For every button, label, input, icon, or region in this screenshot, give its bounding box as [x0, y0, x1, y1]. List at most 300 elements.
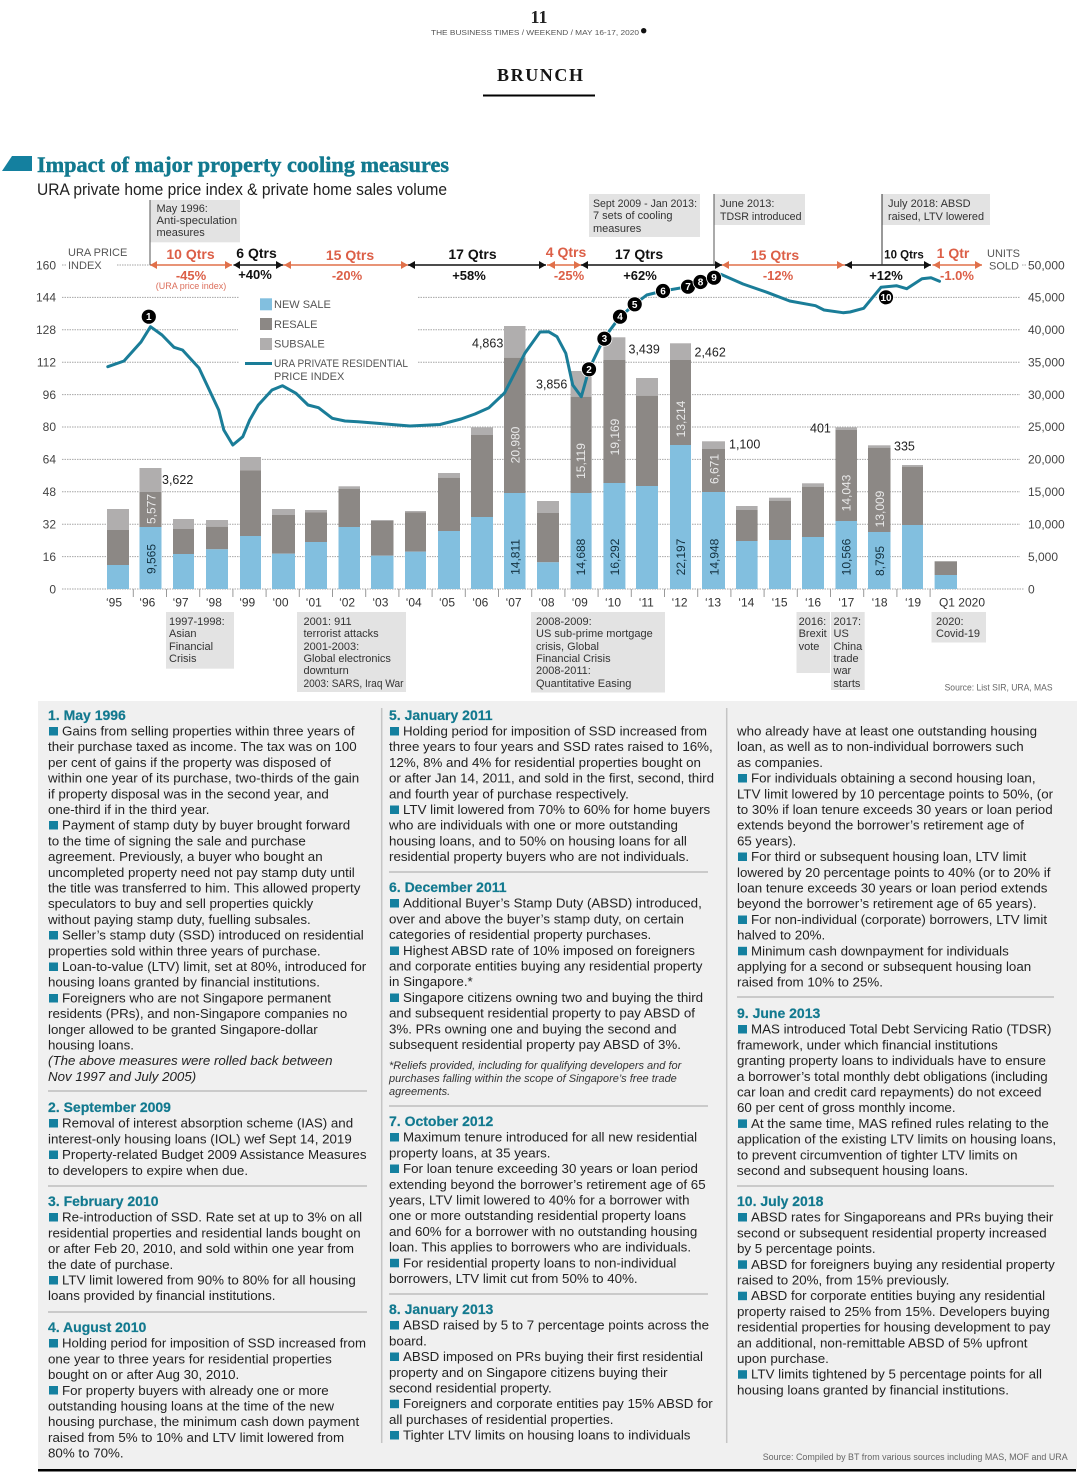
section: 5. January 2011: three years to four years and SSD rates raised to 16%, — [389, 739, 713, 754]
numbered markers — [141, 270, 894, 377]
callout: 2001-2003 events: 2003: SARS, Iraq War — [304, 678, 404, 690]
section: 8. January 2013 continued: raised from 10% to 25%. — [737, 975, 883, 990]
right axis labels: 50,000 — [1028, 258, 1065, 272]
section: 10. July 2018: ABSD for corporate entities buying any residential — [751, 1288, 1045, 1303]
subsale value labels: 4,863 — [472, 336, 503, 350]
callout: 2001-2003 events — [297, 612, 406, 692]
right axis labels: 30,000 — [1028, 388, 1065, 402]
x axis year labels: ‘10 — [605, 596, 621, 610]
section: 1. May 1996: housing loans. — [48, 1038, 134, 1052]
column 1 — [47, 707, 367, 1461]
section: 10. July 2018: by 5 percentage points. — [737, 1241, 876, 1256]
right axis labels: 35,000 — [1028, 356, 1065, 370]
section: 7. October 2012: extending beyond the borrower’s retirement age of 65 — [389, 1177, 706, 1192]
numbered markers: 10 — [880, 293, 892, 304]
period labels: percentage change: (URA price index) — [156, 281, 226, 291]
column 3 — [736, 724, 1056, 1397]
legend: URA PRIVATE RESIDENTIAL — [274, 358, 408, 370]
axis titles: INDEX — [68, 260, 102, 272]
left axis labels: 128 — [36, 323, 56, 337]
x axis year labels: ‘05 — [439, 596, 455, 610]
grid lines — [62, 265, 1027, 589]
callout: Sept 2009 - Jan 2013: Sept 2009 - Jan 2013: — [593, 198, 697, 210]
section: 3. February 2010: or after Feb 20, 2010, and sold within one year from — [48, 1241, 354, 1256]
axis titles: SOLD — [989, 260, 1019, 272]
right axis labels: 0 — [1028, 582, 1035, 596]
callout: 2008-2011 events: 2008-2011: — [536, 665, 591, 677]
callout: 2001-2003 events: downturn — [304, 665, 349, 677]
x axis year labels: ‘04 — [406, 596, 422, 610]
section: 7. October 2012: 7. October 2012 — [389, 1113, 493, 1129]
section: 9. June 2013: 60 per cent of gross monthly income. — [737, 1100, 956, 1115]
period labels: percentage change: +58% — [452, 268, 486, 283]
section: 8. January 2013 continued: halved to 20%. — [737, 928, 825, 943]
section: 6. December 2011: Singapore citizens owning two and buying the third — [403, 990, 703, 1005]
right axis labels: 45,000 — [1028, 290, 1065, 304]
callout: 2001-2003 events: Global electronics — [304, 653, 391, 665]
callout: US China trade war: 2017: — [834, 616, 861, 628]
section: 9. June 2013: a borrower’s total monthly debt obligations (including — [737, 1069, 1048, 1084]
section: 1. May 1996: properties sold within three years of purchase. — [48, 943, 321, 958]
section: 1. May 1996: without paying stamp duty, fuelling subsales. — [47, 912, 311, 927]
section: 8. January 2013: ABSD raised by 5 to 7 percentage points across the — [403, 1318, 709, 1333]
x axis year labels: ‘13 — [705, 596, 721, 610]
x axis year labels: ‘16 — [805, 596, 821, 610]
section: 4. August 2010: outstanding housing loans at the time of the new — [48, 1398, 334, 1414]
panel: measures background — [38, 701, 1077, 1469]
section: 1. May 1996: per cent of gains if the property was disposed of — [48, 755, 331, 770]
page number: 11 — [530, 7, 548, 27]
rotated values inside bars: 8,795 — [873, 546, 887, 576]
column separators — [382, 708, 727, 1443]
legend — [245, 298, 408, 383]
section: 2. September 2009: Removal of interest absorption scheme (IAS) and — [62, 1116, 353, 1131]
period labels: percentage change: +62% — [623, 268, 657, 283]
rotated values inside bars: 13,214 — [674, 400, 688, 437]
subsale value labels: 3,856 — [536, 378, 567, 392]
section: 10. July 2018: ABSD for foreigners buying any residential property — [751, 1257, 1055, 1272]
section: 6. December 2011 — [388, 879, 703, 1098]
legend: SUBSALE — [274, 338, 325, 350]
x axis year labels: ‘95 — [106, 596, 122, 610]
numbered markers: 6 — [660, 286, 666, 298]
period labels: quarters: 1 Qtr — [937, 245, 970, 261]
section: 5. January 2011 — [388, 707, 714, 864]
callout: Asian Financial Crisis: Asian — [169, 628, 197, 640]
period labels: percentage change: -25% — [554, 268, 585, 283]
callout: US China trade war: trade — [834, 653, 859, 665]
section: 7. October 2012: property loans, at 35 years. — [389, 1145, 551, 1160]
section: 8. January 2013 continued: loan tenure exceeds 30 years or loan period extends — [737, 880, 1048, 896]
callout: 2008-2011 events: crisis, Global — [536, 641, 599, 653]
x axis year labels: ‘96 — [139, 596, 156, 610]
axis titles: URA PRICE — [68, 247, 127, 259]
section: 1. May 1996: Payment of stamp duty by buyer brought forward — [62, 818, 350, 833]
left axis labels: 32 — [43, 518, 56, 532]
rotated values inside bars: 19,169 — [608, 418, 622, 455]
section: 1. May 1996: 1. May 1996 — [48, 707, 126, 723]
callout: Asian Financial Crisis — [166, 612, 234, 669]
icon: teal trapezoid — [2, 156, 32, 171]
numbered markers: 5 — [632, 300, 638, 311]
x axis year labels: ‘06 — [472, 596, 489, 610]
section: 6. December 2011: *Reliefs provided, including for qualifying developers and for — [389, 1060, 683, 1072]
legend: NEW SALE — [274, 299, 331, 311]
period labels: percentage change: -45% — [176, 268, 207, 283]
section: 10. July 2018: raised to 20%, from 15% previously. — [737, 1272, 949, 1288]
section: 4. August 2010: For property buyers with already one or more — [62, 1383, 329, 1398]
x axis year labels: ‘07 — [506, 596, 522, 610]
x axis year labels: ‘99 — [239, 596, 256, 610]
callout: May 1996: May 1996: — [156, 203, 208, 215]
section: 7. October 2012: For loan tenure exceeding 30 years or loan period — [403, 1161, 698, 1176]
left axis labels: 112 — [37, 356, 56, 370]
right axis labels: 5,000 — [1028, 550, 1058, 564]
section: 8. January 2013: 8. January 2013 — [389, 1301, 494, 1317]
subsale value labels: 2,462 — [694, 346, 726, 360]
section: 8. January 2013 continued: For individuals obtaining a second housing loan, — [751, 771, 1036, 786]
subsale value labels: 3,439 — [628, 342, 660, 356]
x axis year labels: ‘09 — [572, 596, 588, 610]
section: 10. July 2018: housing loans granted by financial institutions. — [737, 1382, 1009, 1397]
section: 7. October 2012: For residential property loans to non-individual — [403, 1255, 676, 1270]
x axis year labels: ‘08 — [538, 596, 555, 610]
section: 9. June 2013: to prevent circumvention of tighter LTV limits on — [737, 1147, 1018, 1162]
callout: Brexit: vote — [799, 641, 819, 653]
section: 8. January 2013 continued: For third or subsequent housing loan, LTV limit — [751, 849, 1027, 864]
section: 8. January 2013 continued: 65 years). — [737, 833, 796, 848]
section: 5. January 2011: or after Jan 14, 2011, and sold in the first, second, third — [389, 771, 714, 786]
left axis labels: 160 — [36, 258, 56, 272]
callout: Covid-19: 2020: — [936, 616, 964, 628]
section: 4. August 2010: bought on or after Aug 30, 2010. — [48, 1367, 239, 1382]
callout: 2008-2011 events: 2008-2009: — [536, 616, 592, 628]
chart source: Source: List SIR, URA, MAS — [945, 682, 1053, 694]
left axis labels: 80 — [43, 420, 56, 434]
divider 8 — [737, 1185, 1054, 1187]
section: 10. July 2018: residential properties for housing development to pay — [737, 1320, 1051, 1335]
section: 5. January 2011: and fourth year of purchase respectively. — [389, 786, 629, 801]
section: 6. December 2011: agreements. — [389, 1086, 450, 1098]
section: 9. June 2013: granting property loans to individuals have to ensure — [737, 1053, 1046, 1068]
section: 6. December 2011: over and above the buyer’s stamp duty, on certain — [389, 911, 684, 926]
bottom rule — [38, 1469, 1076, 1472]
section: 6. December 2011: and subsequent residential property to pay ABSD of — [389, 1006, 695, 1021]
section: 4. August 2010: one year to three years for residential properties — [48, 1351, 332, 1366]
right axis labels: 25,000 — [1028, 420, 1065, 434]
x axis ticks — [133, 589, 930, 597]
section: 9. June 2013: MAS introduced Total Debt Servicing Ratio (TDSR) — [751, 1022, 1052, 1037]
callout: Asian Financial Crisis: Financial — [169, 641, 213, 653]
section: 1. May 1996: Seller’s stamp duty (SSD) introduced on residential — [62, 928, 364, 943]
section: 8. January 2013 — [389, 1301, 713, 1443]
section: 2. September 2009: Property-related Budget 2009 Assistance Measures — [62, 1147, 367, 1162]
section: 3. February 2010: loans provided by financial institutions. — [48, 1288, 275, 1303]
rotated values inside bars: 14,948 — [708, 538, 722, 575]
section: 7. October 2012: loan. This applies to borrowers who are individuals. — [389, 1240, 691, 1255]
section: 2. September 2009: to developers to expire when due. — [48, 1163, 248, 1178]
section: 2. September 2009: 2. September 2009 — [48, 1099, 171, 1115]
x axis year labels: ‘98 — [206, 596, 222, 610]
left axis labels: 16 — [43, 550, 56, 564]
left axis labels: 0 — [49, 582, 56, 596]
legend: PRICE INDEX — [274, 371, 345, 383]
section: 9. June 2013: 9. June 2013 — [737, 1005, 820, 1021]
divider 1 — [48, 1090, 367, 1092]
callout: 2008-2011 events: Financial Crisis — [536, 653, 611, 665]
x axis year labels: ‘03 — [372, 596, 389, 610]
section: 1. May 1996: agreement. Previously, a buyer who bought an — [48, 849, 323, 864]
section: 5. January 2011: who are individuals with one or more outstanding — [388, 818, 678, 833]
period labels: quarters: 4 Qtrs — [546, 244, 586, 260]
section: 3. February 2010: residential properties and residential lands bought on — [48, 1225, 361, 1240]
chart: price index and sales volume — [36, 194, 1065, 694]
callout: Brexit: Brexit — [799, 628, 827, 640]
period labels: quarters: 17 Qtrs — [615, 246, 663, 262]
section: 6. December 2011: categories of residential property purchases. — [389, 927, 651, 942]
section: 1. May 1996: housing loans granted by financial institutions. — [48, 975, 320, 990]
section: 2. September 2009: interest-only housing loans (IOL) wef Sept 14, 2019 — [48, 1131, 352, 1146]
section: 3. February 2010: Re-introduction of SSD. Rate set at up to 3% on all — [62, 1210, 362, 1225]
x axis year labels: ‘97 — [173, 596, 189, 610]
rotated values inside bars: 15,119 — [574, 443, 588, 479]
callout: Covid-19: Covid-19 — [936, 628, 980, 640]
section: 1. May 1996 — [47, 707, 367, 1084]
section: 9. June 2013: At the same time, MAS refined rules relating to the — [751, 1116, 1049, 1131]
newspaper header — [431, 7, 646, 96]
left axis labels: 48 — [43, 485, 56, 499]
rotated values inside bars: 22,197 — [674, 538, 688, 575]
section: 6. December 2011: subsequent residential property pay ABSD of 3%. — [389, 1037, 681, 1052]
rotated values inside bars: 20,980 — [508, 426, 522, 463]
divider 6 — [389, 1293, 708, 1295]
numbered markers: 8 — [698, 278, 704, 288]
section: 8. January 2013: property and on Singapore citizens buying their — [389, 1365, 668, 1380]
section: 6. December 2011: in Singapore.* — [389, 974, 473, 989]
section rule — [483, 94, 595, 96]
subsale value labels: 401 — [810, 422, 831, 436]
section: 8. January 2013 continued: For non-individual (corporate) borrowers, LTV limit — [751, 912, 1047, 927]
section: 2. September 2009 — [48, 1099, 367, 1178]
period labels: percentage change: -12% — [763, 268, 794, 283]
section: 4. August 2010: housing purchase, the minimum cash down payment — [48, 1414, 359, 1429]
x axis year labels: ‘19 — [905, 596, 921, 610]
callout: 2008-2011 events: Quantitative Easing — [536, 678, 631, 690]
section: 8. January 2013 continued: loan, as well as to non-individual borrowers such — [737, 739, 1024, 754]
period labels: percentage change: -20% — [332, 268, 363, 283]
section: 5. January 2011: LTV limit lowered from 70% to 60% for home buyers — [403, 802, 711, 817]
legend: RESALE — [274, 319, 317, 331]
panel source: Source: Compiled by BT from various sources including MAS, MOF and URA — [763, 1452, 1068, 1463]
title: Impact of major property cooling measures — [37, 152, 449, 177]
callout: Sept 2009 - Jan 2013: measures — [593, 223, 642, 235]
section: 1. May 1996: speculators to buy and sell properties quickly — [48, 896, 314, 911]
section: 6. December 2011: Highest ABSD rate of 10% imposed on foreigners — [403, 943, 695, 958]
subsale value labels: 1,100 — [729, 438, 760, 452]
callout: June 2013: TDSR introduced — [720, 211, 802, 223]
section: 3. February 2010: 3. February 2010 — [48, 1193, 159, 1209]
section: 9. June 2013: second and subsequent housing loans. — [737, 1163, 968, 1178]
section: 5. January 2011: 12%, 8% and 4% for residential properties bought on — [389, 755, 701, 770]
section: 10. July 2018: property raised to 25% from 15%. Developers buying — [737, 1304, 1050, 1319]
x axis year labels: ‘11 — [639, 596, 654, 610]
section: 1. May 1996: the title was transferred to him. This allowed property — [48, 880, 361, 896]
section: 7. October 2012: and 60% for a borrower with no outstanding housing — [389, 1224, 697, 1239]
section: 6. December 2011: purchases falling within the scope of Singapore’s free trade — [388, 1073, 677, 1085]
rotated values inside bars: 6,671 — [708, 454, 722, 484]
callout: May 1996 — [150, 200, 240, 265]
section: 10. July 2018: upon purchase. — [737, 1351, 829, 1366]
callout: US China trade war — [831, 612, 865, 690]
section: 1. May 1996: to the time of signing the sale and purchase — [48, 833, 306, 848]
callout: Covid-19 — [932, 612, 986, 642]
divider 3 — [48, 1311, 367, 1313]
divider 4 — [389, 871, 708, 873]
callout: June 2013 — [714, 194, 805, 265]
header dot — [641, 28, 646, 33]
section: 6. December 2011: 6. December 2011 — [389, 879, 507, 895]
period labels: percentage change — [156, 267, 974, 291]
right axis labels: 15,000 — [1028, 485, 1065, 499]
stacked bars — [107, 326, 957, 589]
section: 10. July 2018 — [737, 1193, 1055, 1397]
section: 9. June 2013: car loan and credit card repayments) do not exceed — [737, 1084, 1042, 1100]
section: 8. January 2013 continued: lowered by 20 percentage points to 40% (or to 20% if — [737, 865, 1051, 880]
period labels: quarters: 10 Qtrs — [166, 246, 215, 262]
section: 8. January 2013: Foreigners and corporate entities pay 15% ABSD for — [403, 1396, 713, 1411]
x axis year labels — [106, 596, 985, 610]
section: 4. August 2010: raised from 5% to 10% and LTV limit lowered from — [48, 1430, 344, 1445]
section: 9. June 2013: framework, under which financial institutions — [737, 1037, 998, 1052]
section: 1. May 1996: (The above measures were rolled back between — [48, 1053, 332, 1068]
callout: 2008-2011 events — [531, 612, 665, 692]
section: 8. January 2013 continued: to 30% if loan tenure exceeds 30 years or loan period — [737, 802, 1053, 817]
x axis year labels: ‘15 — [772, 596, 788, 610]
section: 3. February 2010 — [48, 1193, 362, 1303]
section: 1. May 1996: Nov 1997 and July 2005) — [48, 1069, 196, 1084]
section: 6. December 2011: 3%. PRs owning one and buying the second and — [389, 1021, 676, 1036]
x axis year labels: ‘01 — [306, 596, 322, 610]
callout: US China trade war: starts — [834, 678, 861, 690]
line: URA price index — [108, 274, 940, 445]
callout: Brexit: 2016: — [799, 616, 826, 628]
numbered markers: 2 — [586, 365, 592, 376]
section: 10. July 2018: LTV limits tightened by 5 percentage points for all — [751, 1367, 1042, 1382]
numbered markers: 4 — [617, 312, 623, 323]
left axis labels: 96 — [43, 388, 56, 402]
section: 1. May 1996: their purchase taxed as income. The tax was on 100 — [48, 739, 357, 754]
section: 4. August 2010: 4. August 2010 — [48, 1319, 147, 1335]
period labels: percentage change: +40% — [238, 267, 272, 282]
period labels: quarters: 10 Qtrs — [884, 250, 924, 262]
subsale value labels: 3,622 — [162, 473, 193, 487]
right axis labels: 20,000 — [1028, 452, 1065, 466]
period labels: quarters: 15 Qtrs — [751, 247, 799, 263]
period arrows — [150, 261, 982, 269]
section: 1. May 1996: Loan-to-value (LTV) limit, set at 80%, introduced for — [62, 959, 367, 974]
period labels: quarters: 15 Qtrs — [326, 247, 374, 263]
divider 7 — [737, 996, 1054, 998]
section: 5. January 2011: Holding period for imposition of SSD increased from — [403, 724, 707, 738]
numbered markers: 1 — [146, 312, 152, 323]
rotated values inside bars: 5,577 — [144, 494, 158, 524]
section: 7. October 2012: years, LTV limit lowered to 40% for a borrower with — [389, 1192, 690, 1208]
section: 8. January 2013: second residential property. — [389, 1380, 552, 1396]
callout: 2001-2003 events: 2001-2003: — [304, 641, 359, 653]
subsale value labels: 335 — [894, 440, 915, 454]
left axis labels — [36, 258, 56, 596]
callout: May 1996: Anti-speculation — [156, 215, 237, 227]
publication line: THE BUSINESS TIMES / WEEKEND / MAY 16-17, 2020 — [431, 28, 639, 37]
callout: 2001-2003 events: terrorist attacks — [304, 628, 379, 640]
section: 8. January 2013 continued: as companies. — [737, 755, 823, 770]
callout: May 1996: measures — [156, 227, 205, 239]
period labels: percentage change: -1.0% — [940, 268, 974, 283]
section: 10. July 2018: an additional, non-remittable ABSD of 5% upfront — [737, 1335, 1028, 1350]
axis titles: UNITS — [987, 248, 1020, 260]
rotated values inside bars: 10,566 — [840, 538, 854, 575]
x axis year labels: ‘02 — [339, 596, 355, 610]
rotated values inside bars: 13,009 — [873, 490, 887, 527]
section: 8. January 2013: ABSD imposed on PRs buying their first residential — [403, 1349, 703, 1364]
section: 7. October 2012: borrowers, LTV limit cut from 50% to 40%. — [389, 1271, 638, 1286]
section: 8. January 2013: all purchases of residential properties. — [389, 1412, 613, 1427]
rotated values inside bars: 14,043 — [840, 474, 854, 511]
callout: Sept 2009 - Jan 2013 — [589, 194, 700, 237]
callout: 2001-2003 events: 2001: 911 — [304, 616, 352, 628]
section: 4. August 2010: 80% to 70%. — [48, 1446, 124, 1461]
section: 8. January 2013: board. — [389, 1333, 427, 1348]
section: 1. May 1996: longer allowed to be granted Singapore-dollar — [48, 1022, 318, 1037]
section: 7. October 2012: one or more outstanding residential property loans — [389, 1208, 686, 1223]
section: 9. June 2013 — [737, 1005, 1056, 1178]
section: 1. May 1996: residents (PRs), and non-Singapore companies no — [48, 1006, 347, 1021]
section: 1. May 1996: uncompleted property need not pay stamp duty until — [48, 865, 355, 880]
callout: 2008-2011 events: US sub-prime mortgage — [536, 628, 653, 640]
section: 9. June 2013: application of the existing LTV limits on housing loans, — [737, 1132, 1056, 1147]
section: 1. May 1996: if property disposal was in the second year, and — [48, 786, 329, 801]
numbered markers: 3 — [602, 334, 608, 345]
left axis labels: 144 — [36, 290, 56, 304]
column 2 — [388, 707, 714, 1443]
subsale value labels — [162, 336, 915, 487]
section: 10. July 2018: 10. July 2018 — [737, 1193, 824, 1209]
section: 1. May 1996: Foreigners who are not Singapore permanent — [62, 990, 331, 1005]
section: 1. May 1996: within one year of its purchase, two-thirds of the gain — [47, 771, 359, 786]
axis titles — [68, 247, 1020, 272]
callout: US China trade war: US — [834, 628, 849, 640]
section: 8. January 2013 continued: Minimum cash downpayment for individuals — [751, 943, 1009, 958]
x axis year labels: Q1 2020 — [939, 596, 985, 610]
section: 1. May 1996: Gains from selling properties within three years of — [62, 724, 355, 738]
section: 6. December 2011: and corporate entities buying any residential property — [389, 958, 703, 974]
callout: Sept 2009 - Jan 2013: 7 sets of cooling — [593, 210, 672, 222]
section: 8. January 2013 continued: applying for a second or subsequent housing loan — [737, 959, 1031, 974]
section: 5. January 2011: housing loans, and to 50% on housing loans for all — [389, 833, 687, 848]
numbered markers: 7 — [685, 282, 691, 293]
period labels: quarters — [166, 244, 970, 263]
subtitle: URA private home price index & private home sales volume — [37, 181, 447, 199]
callout: US China trade war: war — [832, 665, 852, 677]
x axis year labels: ‘17 — [838, 596, 855, 610]
section: 4. August 2010 — [48, 1319, 366, 1461]
callout: June 2013: June 2013: — [720, 198, 774, 210]
right axis labels — [1028, 258, 1065, 596]
callout: July 2018: raised, LTV lowered — [888, 211, 984, 223]
period labels: quarters: 6 Qtrs — [236, 245, 277, 261]
rotated values inside bars: 14,688 — [574, 538, 588, 575]
section: 8. January 2013 continued: extends beyond the borrower’s retirement age of — [737, 818, 1024, 833]
